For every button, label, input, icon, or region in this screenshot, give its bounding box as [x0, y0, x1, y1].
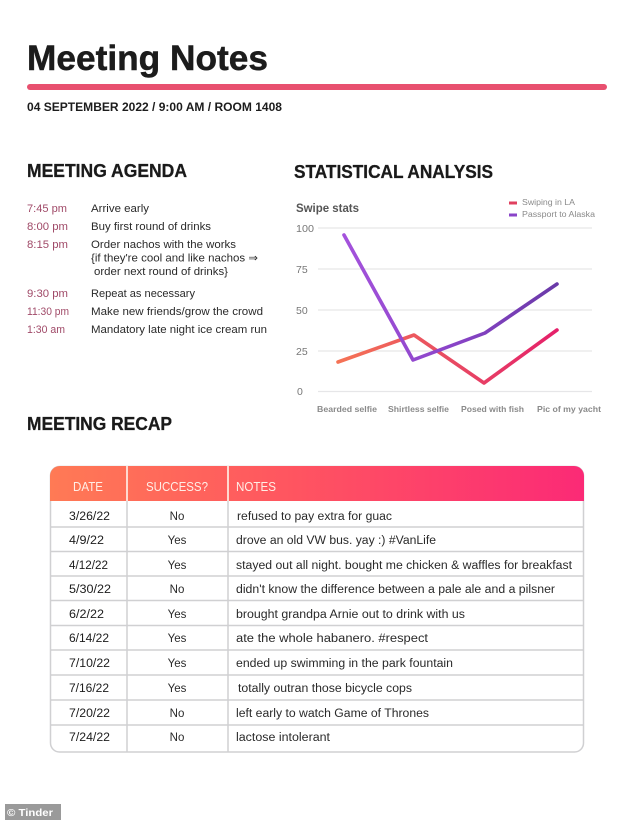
y axis labels: 100 [296, 223, 314, 235]
y axis labels: 0 [297, 386, 303, 398]
legend [509, 198, 596, 219]
row 3: stayed out all night. bought me chicken & waffles for breakfast [236, 560, 573, 572]
panel: recap table [50, 466, 584, 752]
x axis labels: Posed with fish [461, 404, 524, 414]
agenda item: 11:30 pm: Make new friends/grow the crowd [91, 306, 263, 318]
row 6: ate the whole habanero. #respect [236, 633, 429, 645]
row 3: 4/12/22 [69, 560, 108, 572]
agenda item: 9:30 pm: Repeat as necessary [91, 288, 195, 300]
date, time and room: 04 SEPTEMBER 2022 / 9:00 AM / ROOM 1408 [27, 100, 282, 114]
row 8 [69, 683, 412, 695]
agenda item: 7:45 pm [27, 203, 150, 215]
agenda item: 9:30 pm: 9:30 pm [27, 288, 68, 300]
agenda item: 7:45 pm: Arrive early [91, 203, 150, 215]
agenda item: 11:30 pm: 11:30 pm [27, 306, 69, 318]
row 4: didn't know the difference between a pale ale and a pilsner [236, 584, 555, 596]
row 8: 7/16/22 [69, 683, 109, 695]
row 1: No [170, 511, 184, 523]
agenda item: 11:30 pm [27, 306, 263, 318]
agenda item: 1:30 am: 1:30 am [27, 324, 65, 336]
row 6 [69, 633, 429, 645]
row 9: left early to watch Game of Thrones [236, 708, 429, 720]
row 3: Yes [168, 560, 187, 572]
credit: Tinder [5, 804, 61, 820]
agenda item: 1:30 am: Mandatory late night ice cream run [91, 324, 267, 336]
row 10: lactose intolerant [236, 732, 331, 744]
row 5: 6/2/22 [69, 609, 104, 621]
row 2: drove an old VW bus. yay :) #VanLife [236, 535, 436, 547]
agenda item: 8:15 pm: 8:15 pm [27, 239, 68, 251]
row 7 [69, 658, 453, 670]
heading: meeting agenda: MEETING AGENDA [27, 161, 187, 181]
legend: Passport to Alaska [522, 210, 596, 219]
row 9: 7/20/22 [69, 708, 110, 720]
x axis labels: Pic of my yacht [537, 404, 601, 414]
x axis labels: Shirtless selfie [388, 404, 449, 414]
row 7: Yes [168, 658, 187, 670]
row 4 [69, 584, 555, 596]
agenda item: 7:45 pm: 7:45 pm [27, 203, 67, 215]
table header: DATE [73, 480, 103, 494]
row 9 [69, 708, 429, 720]
row 7: ended up swimming in the park fountain [236, 658, 453, 670]
row 1: 3/26/22 [69, 511, 110, 523]
agenda item: 8:15 pm: {if they're cool and like nachos ⇒ [91, 252, 258, 264]
agenda item: 8:15 pm: Order nachos with the works [91, 239, 237, 251]
chart title: Swipe stats [296, 203, 359, 215]
panel: statistical analysis [294, 162, 601, 414]
row 6: 6/14/22 [69, 633, 109, 645]
heading: meeting recap: MEETING RECAP [27, 414, 172, 434]
row 6: Yes [168, 633, 187, 645]
x axis labels: Bearded selfie [317, 404, 377, 414]
y axis labels [296, 223, 314, 398]
row 5: Yes [168, 609, 187, 621]
row 8: Yes [168, 683, 187, 695]
agenda item: 8:00 pm [27, 221, 212, 233]
row 2: Yes [168, 535, 187, 547]
y axis labels: 50 [296, 305, 308, 317]
row 3 [69, 560, 573, 572]
row 10: No [170, 732, 184, 744]
agenda item: 8:15 pm [27, 239, 258, 278]
row 10 [69, 732, 331, 744]
x axis labels [317, 404, 601, 414]
table header: NOTES [236, 480, 276, 494]
row 4: 5/30/22 [69, 584, 111, 596]
y axis labels: 25 [296, 346, 308, 358]
row 1: refused to pay extra for guac [237, 511, 392, 523]
row 2 [69, 535, 436, 547]
agenda item: 8:00 pm: Buy first round of drinks [91, 221, 212, 233]
heading: statistical analysis: STATISTICAL ANALYSIS [294, 162, 493, 182]
title: Meeting Notes [27, 39, 268, 78]
row 8: totally outran those bicycle cops [238, 683, 412, 695]
agenda item: 8:15 pm: order next round of drinks} [94, 266, 228, 278]
agenda item: 8:00 pm: 8:00 pm [27, 221, 68, 233]
panel: meeting agenda [27, 161, 267, 336]
table header [50, 466, 584, 501]
row 4: No [170, 584, 184, 596]
legend: Swiping in LA [522, 198, 576, 207]
title underline [27, 84, 607, 90]
y axis labels: 75 [296, 264, 308, 276]
row 5 [69, 609, 465, 621]
table frame [50, 466, 584, 752]
line: passport to Alaska [344, 235, 557, 360]
row 9: No [170, 708, 184, 720]
row 7: 7/10/22 [69, 658, 110, 670]
row 5: brought grandpa Arnie out to drink with us [236, 609, 465, 621]
line: swiping in LA [338, 330, 557, 383]
row 2: 4/9/22 [69, 535, 104, 547]
agenda item: 9:30 pm [27, 288, 195, 300]
table header: SUCCESS? [146, 480, 208, 494]
row 1 [69, 511, 392, 523]
row 10: 7/24/22 [69, 732, 110, 744]
credit: Tinder: © Tinder [7, 807, 53, 819]
